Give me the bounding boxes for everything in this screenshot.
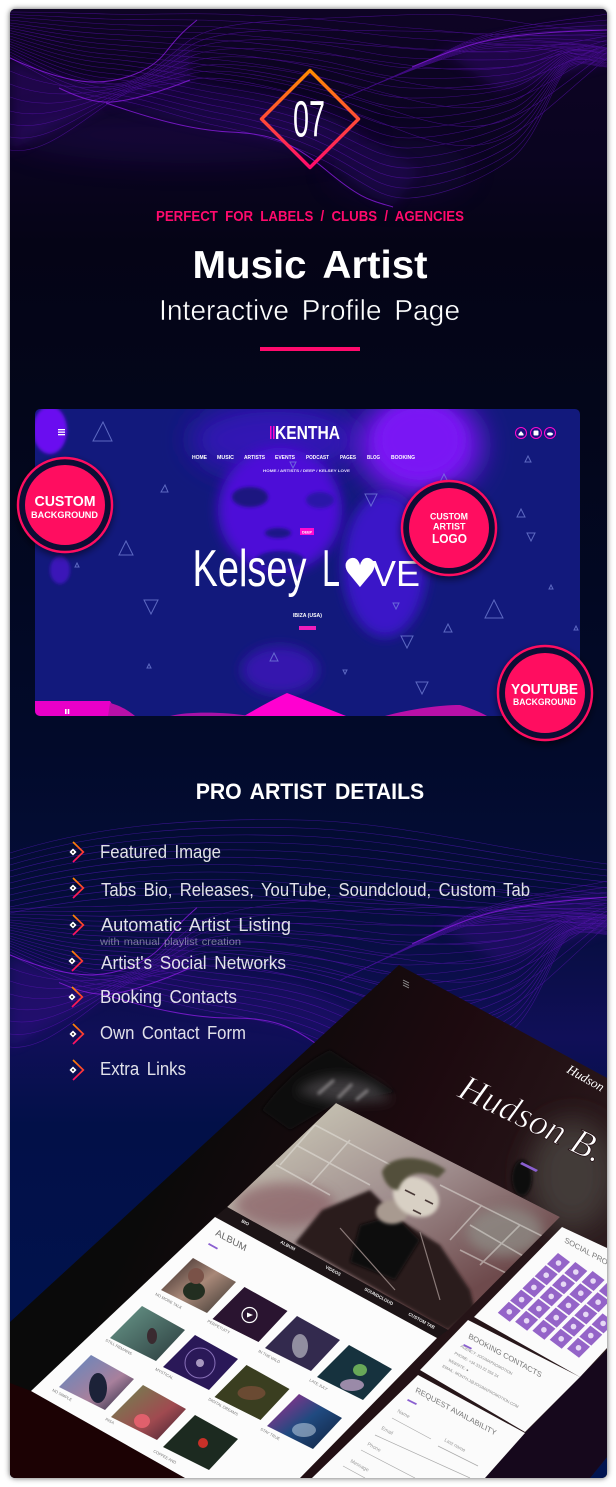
item: contact form: Own Contact Form xyxy=(100,1023,246,1043)
callout: custom background: BACKGROUND xyxy=(31,510,98,521)
mockup request availability panel: Last name xyxy=(443,1437,467,1454)
bottom pink shapes xyxy=(35,693,487,716)
screenshot backdrop: artist portrait xyxy=(33,393,482,694)
navigation: BLOG xyxy=(367,455,380,461)
social icons xyxy=(516,428,556,438)
callout: youtube background: YOUTUBE xyxy=(511,681,578,698)
album captions: PERPETUITY xyxy=(207,1318,231,1335)
pause icon xyxy=(65,709,69,714)
mockup album panel xyxy=(31,1217,437,1478)
pink rule xyxy=(299,626,316,630)
location: IBIZA (USA) xyxy=(293,613,322,619)
callout: youtube background xyxy=(498,646,592,740)
panel: hero screenshot xyxy=(33,393,580,716)
mockup request availability panel: Email xyxy=(380,1425,394,1437)
mockup request availability panel: Message xyxy=(349,1458,370,1474)
item: extra links: Extra Links xyxy=(100,1059,186,1079)
mockup booking contacts panel: AGENCY: JOGIMAPROMOTION xyxy=(460,1343,514,1376)
social icon grid xyxy=(498,1253,616,1358)
artist name: VE xyxy=(372,553,420,594)
navigation: ARTISTS xyxy=(244,455,266,461)
section heading: PRO ARTIST DETAILS xyxy=(196,779,424,804)
artist name: ♥ xyxy=(342,551,378,597)
top glow xyxy=(10,107,470,200)
logo: KENTHA: KENTHA xyxy=(275,423,340,443)
navigation xyxy=(192,455,415,459)
perspective page mockup xyxy=(10,965,616,1478)
menu icon xyxy=(58,429,65,435)
mockup tab bar: CUSTOM TAB xyxy=(408,1311,436,1330)
mockup booking contacts panel xyxy=(420,1320,580,1432)
decorative triangles xyxy=(75,422,578,694)
mockup signature name: Hudson B. xyxy=(452,1066,611,1170)
navigation: PODCAST xyxy=(306,455,329,461)
mockup request availability panel xyxy=(312,1375,525,1478)
breadcrumb: HOME / ARTISTS / DEEP / KELSEY LOVE xyxy=(263,468,350,473)
callout: custom artist logo: LOGO xyxy=(432,531,467,546)
callout: custom background: CUSTOM xyxy=(34,493,96,510)
item: tabs: Tabs Bio, Releases, YouTube, Soundcloud, Custom Tab xyxy=(101,880,530,900)
callout: custom background xyxy=(18,458,112,552)
artist name: L xyxy=(322,540,340,598)
mockup booking contacts panel: BOOKING CONTACTS xyxy=(467,1332,543,1379)
album captions: STAY TRUE xyxy=(260,1426,281,1441)
subtitle: Interactive Profile Page xyxy=(159,295,460,327)
album captions: STILL REMAINS xyxy=(105,1337,133,1356)
album captions: LATE JULY xyxy=(309,1377,329,1392)
genre badge xyxy=(300,528,314,535)
item: social networks: Artist's Social Networks xyxy=(101,953,286,973)
item: automatic artist listing xyxy=(69,915,291,948)
mockup dark page xyxy=(10,965,607,1478)
mockup tab bar: VIDEOS xyxy=(325,1264,342,1277)
album captions: COFFEE AND xyxy=(153,1448,177,1465)
mockup request availability panel: Name xyxy=(396,1408,411,1420)
lower wave pattern xyxy=(10,880,607,1048)
album captions xyxy=(52,1291,329,1465)
mockup accent bar xyxy=(520,1162,538,1172)
artist name xyxy=(196,548,418,597)
mockup booking contacts panel: PHONE: +34 333 22 556 34 xyxy=(454,1350,500,1379)
item: extra links xyxy=(69,1059,186,1080)
accent bar xyxy=(260,347,360,351)
logo: KENTHA xyxy=(270,426,340,439)
mockup header photo: leather jacket xyxy=(262,1050,395,1130)
man's neck and face xyxy=(376,1200,408,1224)
mockup tab bar: SOUNDCLOUD xyxy=(364,1286,395,1307)
mockup header photo: person at right xyxy=(512,1119,616,1231)
top wave pattern xyxy=(10,12,607,207)
genre badge: DEEP xyxy=(302,529,312,534)
mockup hero photo xyxy=(227,1103,560,1330)
mockup tab bar: ALBUM xyxy=(280,1239,296,1252)
album captions: MYSTICAL xyxy=(155,1366,175,1381)
navigation: MUSIC xyxy=(217,455,234,461)
feature list xyxy=(68,842,530,1080)
album heading rule xyxy=(208,1243,218,1250)
album captions: NO MORE TALK xyxy=(155,1291,183,1310)
navigation: PAGES xyxy=(340,455,357,461)
mockup social profiles panel xyxy=(474,1227,616,1377)
item: automatic artist listing: Automatic Artist Listing xyxy=(101,915,291,935)
mockup lower-left maroon band xyxy=(10,1383,185,1478)
mockup booking contacts panel: WEBSITE: ● xyxy=(448,1357,470,1373)
item: booking contacts: Booking Contacts xyxy=(100,987,237,1007)
album captions: DIGITAL DREAMS xyxy=(208,1396,239,1417)
badge: number 07 in diamond: 07 xyxy=(293,90,325,148)
mockup lower-right band xyxy=(485,1350,607,1478)
album thumbnails xyxy=(59,1258,392,1470)
album captions: RISA xyxy=(105,1416,115,1425)
mockup request availability panel: REQUEST AVAILABILITY xyxy=(414,1386,498,1438)
badge: number 07 in diamond xyxy=(262,70,358,168)
item: automatic artist listing: with manual playlist creation xyxy=(99,936,241,948)
callout: custom artist logo xyxy=(402,481,496,575)
man's jacket xyxy=(295,1190,475,1330)
navigation: EVENTS xyxy=(275,455,296,461)
navigation: HOME xyxy=(192,455,208,461)
album captions: NO SIMPLE xyxy=(52,1387,73,1402)
lower wave dome lines xyxy=(10,820,607,924)
mockup tab bar xyxy=(215,1207,448,1338)
item: featured image: Featured Image xyxy=(100,842,221,862)
album captions: IN THE WILD xyxy=(258,1348,281,1364)
callout: custom artist logo: CUSTOM xyxy=(430,512,468,522)
mockup small signature: Hudson xyxy=(564,1061,607,1094)
callout: youtube background: BACKGROUND xyxy=(513,697,576,708)
man's hair xyxy=(382,1158,446,1190)
artist name: Kelsey xyxy=(192,540,306,598)
mockup request availability panel: Phone xyxy=(366,1441,382,1454)
album heading: ALBUM xyxy=(214,1228,248,1254)
mockup menu icon xyxy=(403,980,409,988)
mockup tab bar: BIO xyxy=(241,1218,250,1227)
eyebrow: PERFECT FOR LABELS / CLUBS / AGENCIES xyxy=(156,208,464,225)
navigation: BOOKING xyxy=(391,455,415,461)
mockup booking contacts panel: EMAIL: MONTH.J@JOGIMAPROMOTION.COM xyxy=(442,1363,520,1409)
title: Music Artist xyxy=(192,244,428,287)
callout: custom artist logo: ARTIST xyxy=(433,522,466,532)
